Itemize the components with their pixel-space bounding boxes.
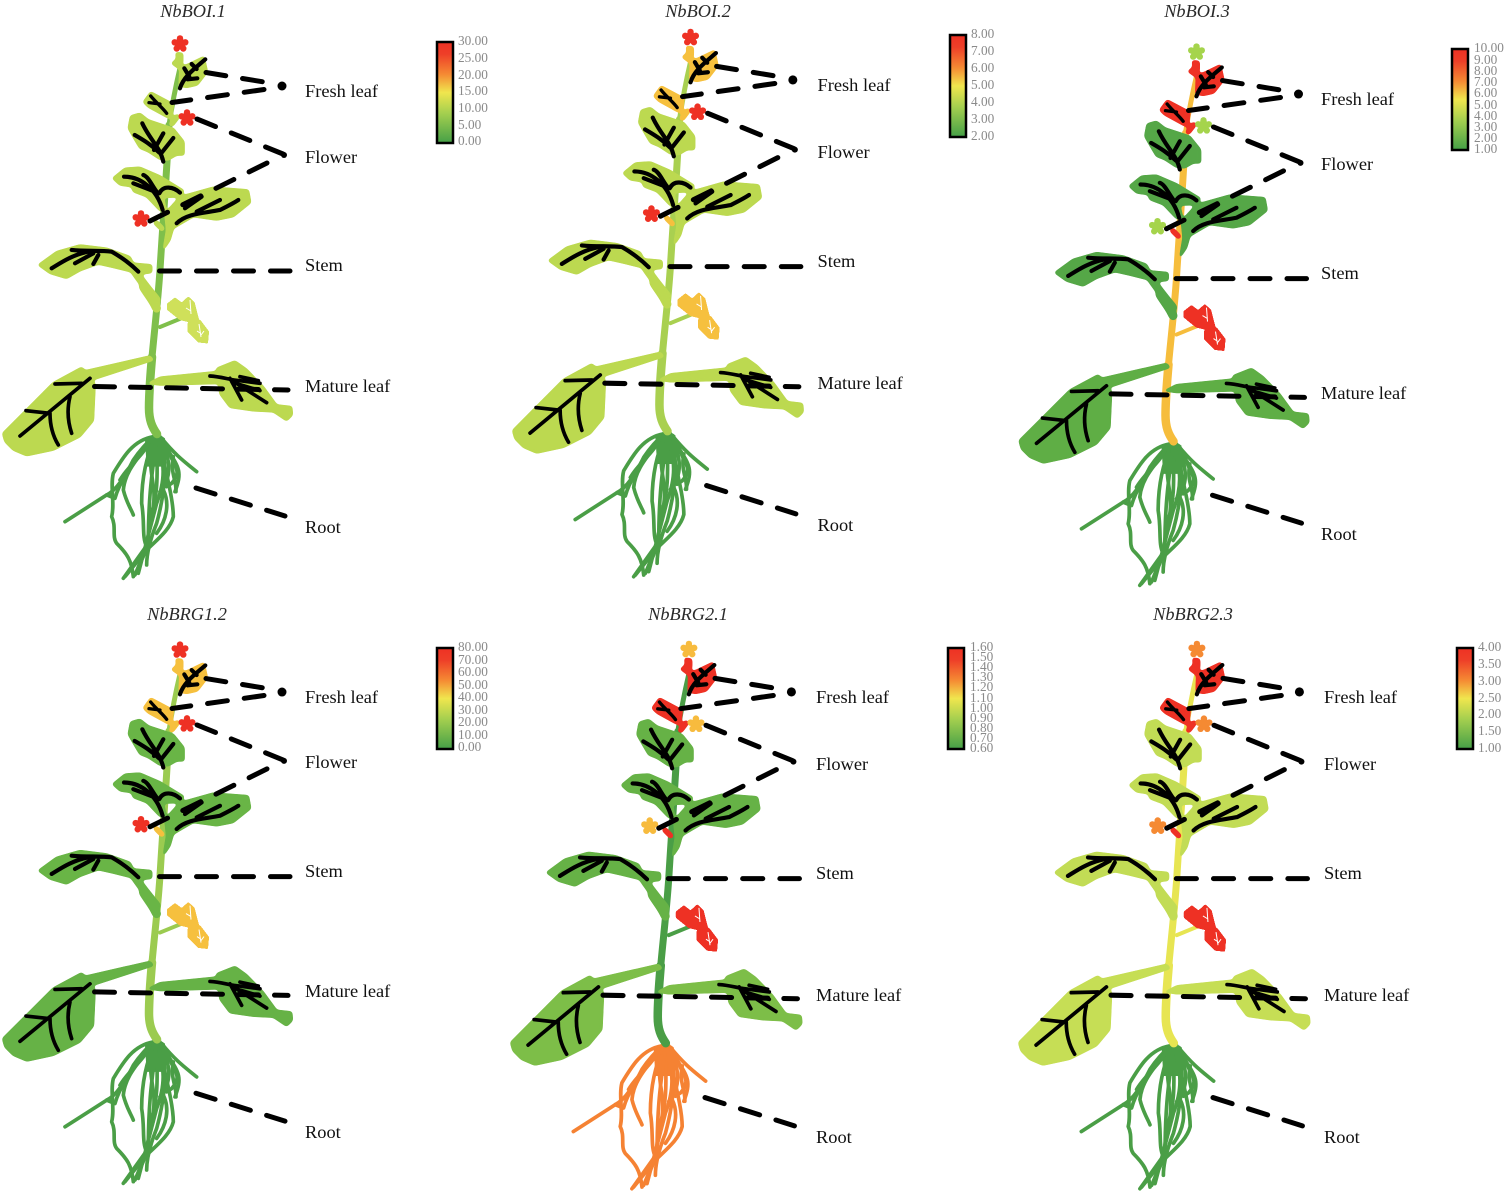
tissue labels: Fresh leaf — [816, 687, 890, 707]
stem — [658, 674, 691, 1043]
tissue labels: Mature leaf — [1324, 985, 1410, 1005]
plant diagram: NbBRG2.3 — [1019, 641, 1310, 1189]
colour scale legend — [1452, 40, 1504, 156]
stem — [149, 68, 182, 434]
panel: NbBOI.1 — [3, 1, 488, 578]
tissue labels — [816, 687, 902, 1147]
mature leaves — [513, 352, 803, 453]
young leaf — [168, 903, 208, 948]
title: NbBRG2.3: NbBRG2.3 — [1152, 604, 1233, 624]
tissue labels — [818, 75, 904, 535]
panel: NbBRG2.1 — [511, 604, 994, 1189]
tissue labels: Root — [818, 515, 853, 535]
colour scale legend: 0.00 — [458, 133, 482, 148]
colour scale legend: 50.00 — [458, 677, 488, 692]
leaf veins — [528, 665, 776, 1054]
tissue labels: Stem — [305, 255, 344, 275]
flowers — [641, 641, 704, 834]
tissue labels: Flower — [305, 752, 357, 772]
colour scale legend: 1.50 — [970, 649, 994, 664]
colour scale legend: 1.60 — [970, 639, 994, 654]
flowers — [1149, 43, 1212, 234]
upper leaves — [548, 108, 761, 304]
tissue labels: Root — [305, 517, 341, 537]
plant diagram: NbBRG1.2 — [3, 641, 292, 1183]
colour scale legend: 4.00 — [1478, 639, 1502, 654]
flowers — [643, 29, 706, 222]
panel: NbBOI.3 — [1019, 1, 1504, 585]
colour scale legend: 30.00 — [458, 33, 488, 48]
tissue labels: Fresh leaf — [305, 687, 379, 707]
tissue labels: Fresh leaf — [1324, 687, 1398, 707]
plant diagram: NbBOI.2 — [513, 29, 803, 577]
colour scale legend: 0.90 — [970, 710, 994, 725]
stem — [1166, 76, 1198, 441]
flowers — [1149, 641, 1212, 834]
tissue labels: Root — [1321, 524, 1357, 544]
title: NbBRG1.2: NbBRG1.2 — [146, 604, 227, 624]
colour scale legend: 25.00 — [458, 50, 488, 65]
fresh leaves — [143, 659, 207, 834]
colour scale legend: 20.00 — [458, 714, 488, 729]
upper leaves — [1055, 720, 1268, 916]
colour scale legend: 5.00 — [1474, 97, 1498, 112]
young leaf — [168, 297, 208, 343]
colour scale legend: 9.00 — [1474, 52, 1498, 67]
colour scale legend: 70.00 — [458, 652, 488, 667]
mature leaves — [1019, 363, 1309, 463]
mature leaves — [511, 964, 802, 1065]
fresh leaves — [654, 46, 718, 224]
leaf veins — [20, 665, 267, 1050]
plant diagram: NbBOI.1 — [3, 35, 292, 578]
tissue labels — [305, 81, 391, 537]
colour scale legend: 2.00 — [1478, 706, 1502, 721]
young leaf — [1184, 905, 1225, 951]
root — [573, 1044, 706, 1189]
colour scale legend: 1.10 — [970, 690, 994, 705]
title: NbBOI.3: NbBOI.3 — [1163, 1, 1230, 21]
colour scale legend: 15.00 — [458, 83, 488, 98]
colour scale legend: 30.00 — [458, 702, 488, 717]
colour scale legend: 20.00 — [458, 67, 488, 82]
colour scale legend: 1.00 — [1478, 740, 1502, 755]
colour scale legend: 3.00 — [1474, 119, 1498, 134]
leaf veins — [530, 53, 777, 442]
colour scale legend: 1.30 — [970, 669, 994, 684]
colour scale legend: 2.00 — [1474, 130, 1498, 145]
leaf veins — [1036, 665, 1284, 1054]
tissue labels: Root — [305, 1122, 341, 1142]
tissue labels: Flower — [1324, 754, 1376, 774]
tissue labels: Fresh leaf — [1321, 89, 1395, 109]
upper leaves — [547, 720, 760, 916]
tissue labels: Stem — [1324, 863, 1363, 883]
upper leaves — [1055, 121, 1267, 316]
title: NbBRG2.1: NbBRG2.1 — [647, 604, 728, 624]
tissue labels: Flower — [1321, 154, 1373, 174]
plant diagram: NbBRG2.1 — [511, 641, 802, 1189]
tissue labels: Root — [1324, 1127, 1360, 1147]
leaf veins — [20, 59, 267, 445]
colour scale legend: 3.00 — [1478, 673, 1502, 688]
colour scale legend: 5.00 — [458, 117, 482, 132]
colour scale legend: 0.60 — [970, 740, 994, 755]
colour scale legend — [950, 26, 995, 143]
colour scale legend: 80.00 — [458, 639, 488, 654]
leader lines — [1111, 81, 1306, 523]
leader lines — [605, 66, 801, 514]
root — [65, 1040, 197, 1183]
colour scale legend — [437, 639, 488, 754]
tissue labels: Mature leaf — [816, 985, 902, 1005]
tissue labels: Mature leaf — [818, 373, 904, 393]
tissue labels: Flower — [305, 147, 357, 167]
colour scale legend: 8.00 — [971, 26, 995, 41]
stem — [1166, 674, 1199, 1043]
tissue labels: Mature leaf — [305, 981, 391, 1001]
mature leaves — [3, 961, 292, 1061]
colour scale legend: 10.00 — [1474, 40, 1504, 55]
flowers — [132, 641, 196, 832]
colour scale legend — [437, 33, 488, 148]
leader lines — [1111, 678, 1307, 1126]
root — [1081, 442, 1213, 585]
panel: NbBRG1.2 — [3, 604, 488, 1183]
young leaf — [676, 905, 717, 951]
fresh leaves — [143, 53, 207, 229]
colour scale legend: 6.00 — [971, 60, 995, 75]
root — [65, 435, 197, 578]
colour scale legend: 1.50 — [1478, 723, 1502, 738]
tissue labels: Mature leaf — [305, 376, 391, 396]
colour scale legend: 40.00 — [458, 689, 488, 704]
colour scale legend: 60.00 — [458, 664, 488, 679]
colour scale legend: 5.00 — [971, 77, 995, 92]
colour scale legend: 1.20 — [970, 679, 994, 694]
colour scale legend: 0.70 — [970, 730, 994, 745]
tissue labels: Root — [816, 1127, 852, 1147]
colour scale legend — [1457, 639, 1502, 755]
colour scale legend: 1.00 — [970, 700, 994, 715]
colour scale legend: 1.40 — [970, 659, 994, 674]
flowers — [132, 35, 196, 227]
colour scale legend — [948, 639, 994, 755]
tissue labels: Stem — [1321, 263, 1360, 283]
mature leaves — [1019, 964, 1310, 1065]
plant diagram: NbBOI.3 — [1019, 43, 1309, 585]
tissue labels — [1321, 89, 1407, 544]
colour scale legend: 1.00 — [1474, 141, 1498, 156]
young leaf — [678, 293, 719, 339]
tissue labels — [1324, 687, 1410, 1147]
fresh leaves — [1160, 61, 1224, 236]
root — [575, 432, 707, 577]
fresh leaves — [652, 658, 716, 836]
colour scale legend: 0.80 — [970, 720, 994, 735]
panel: NbBOI.2 — [513, 1, 995, 577]
stem — [149, 674, 182, 1039]
tissue labels: Flower — [816, 754, 868, 774]
stem — [659, 62, 693, 431]
leader lines — [94, 72, 290, 516]
fresh leaves — [1160, 658, 1224, 836]
panel: NbBRG2.3 — [1019, 604, 1502, 1189]
young leaf — [1184, 305, 1225, 350]
tissue labels: Mature leaf — [1321, 383, 1407, 403]
mature leaves — [3, 356, 292, 456]
tissue labels: Stem — [816, 863, 855, 883]
colour scale legend: 10.00 — [458, 727, 488, 742]
colour scale legend: 8.00 — [1474, 63, 1498, 78]
root — [1081, 1044, 1214, 1189]
colour scale legend: 7.00 — [1474, 74, 1498, 89]
tissue labels: Flower — [818, 142, 870, 162]
colour scale legend: 3.00 — [971, 111, 995, 126]
tissue labels: Stem — [818, 251, 856, 271]
colour scale legend: 4.00 — [971, 94, 995, 109]
tissue labels: Fresh leaf — [305, 81, 379, 101]
colour scale legend: 6.00 — [1474, 85, 1498, 100]
leader lines — [603, 678, 799, 1126]
colour scale legend: 0.00 — [458, 739, 482, 754]
leaf veins — [1036, 67, 1283, 452]
tissue labels — [305, 687, 391, 1142]
title: NbBOI.1: NbBOI.1 — [159, 1, 226, 21]
colour scale legend: 10.00 — [458, 100, 488, 115]
tissue labels: Stem — [305, 861, 344, 881]
leader lines — [94, 679, 290, 1121]
colour scale legend: 4.00 — [1474, 108, 1498, 123]
tissue labels: Fresh leaf — [818, 75, 891, 95]
colour scale legend: 2.50 — [1478, 690, 1502, 705]
colour scale legend: 3.50 — [1478, 656, 1502, 671]
title: NbBOI.2: NbBOI.2 — [664, 1, 731, 21]
upper leaves — [38, 113, 251, 308]
colour scale legend: 2.00 — [971, 128, 995, 143]
colour scale legend: 7.00 — [971, 43, 995, 58]
upper leaves — [38, 719, 251, 914]
